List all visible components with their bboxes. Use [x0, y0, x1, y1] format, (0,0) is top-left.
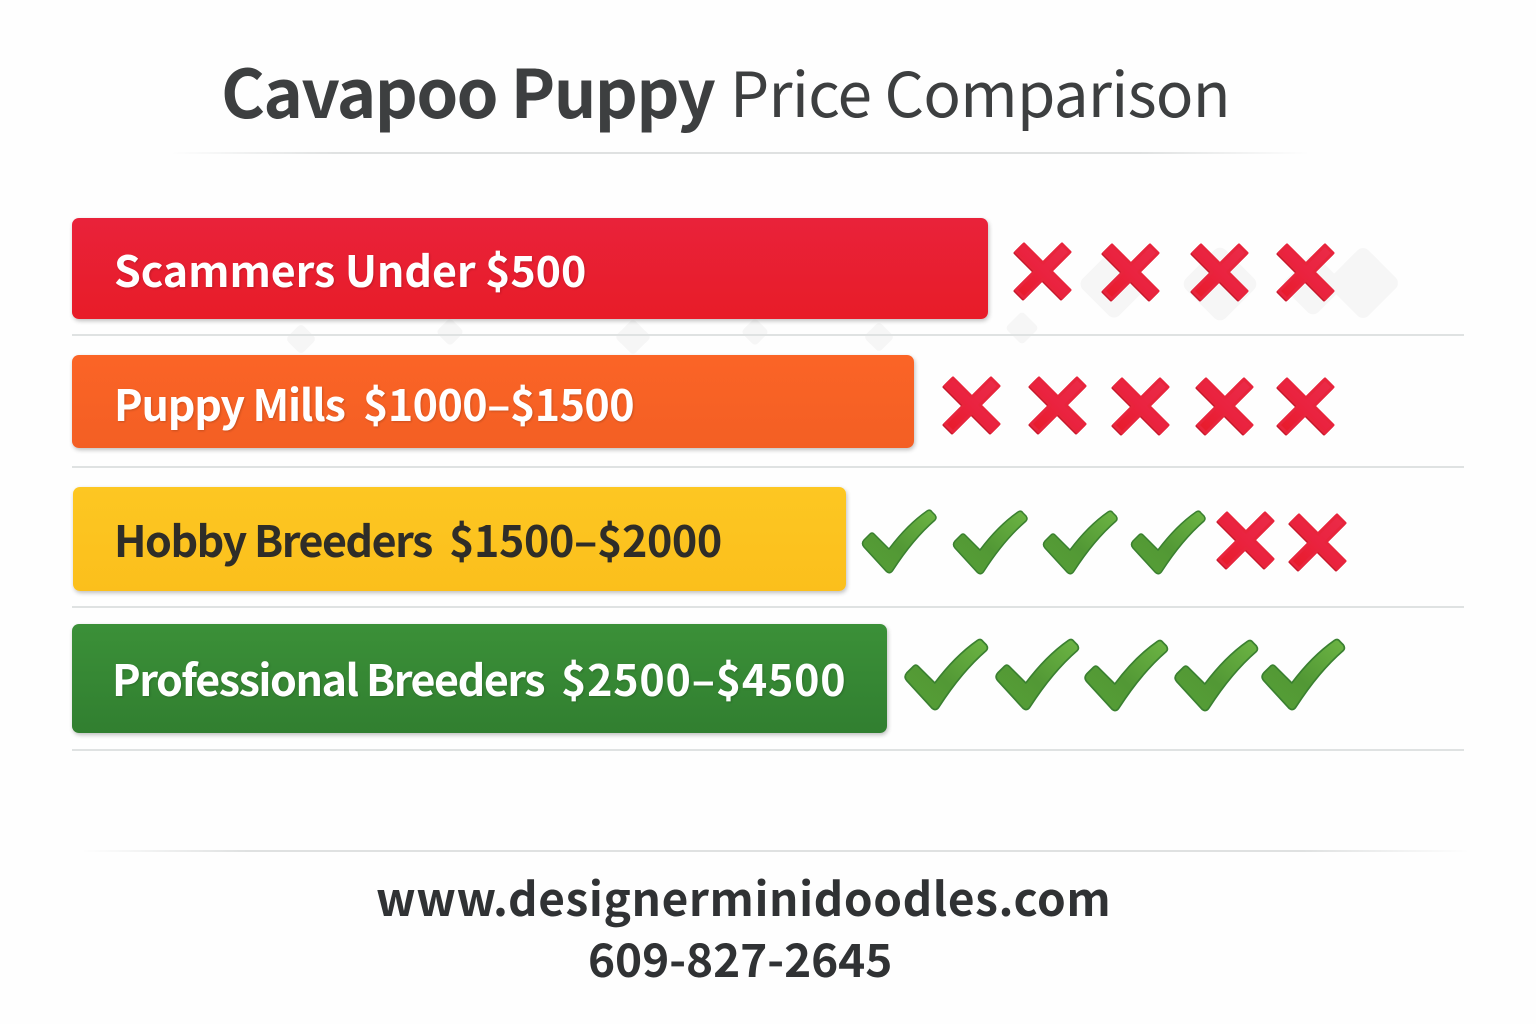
label: professional breeders price: $2500–$4500 — [561, 647, 846, 709]
label: professional breeders price — [112, 647, 846, 709]
label: puppy mills price — [114, 372, 634, 434]
title regular part: Price Comparison — [730, 45, 1230, 135]
bar: professional breeders — [72, 624, 887, 733]
rating: hobby breeders checks and crosses — [862, 510, 1345, 574]
label: hobby breeders price: Hobby Breeders — [114, 508, 432, 570]
bar: hobby breeders — [73, 487, 846, 591]
label: puppy mills price: Puppy Mills — [114, 372, 345, 434]
bar: puppy mills — [72, 355, 914, 448]
label: professional breeders price: Professional Breeders — [112, 647, 544, 709]
label: puppy mills price: $1000–$1500 — [363, 372, 634, 434]
bar: scammers — [72, 218, 988, 319]
footer website: www.designerminidoodles.com — [376, 864, 1111, 930]
rating: scammers crosses — [1015, 244, 1333, 300]
title bold part: Cavapoo Puppy — [221, 41, 714, 138]
label: scammers price: Scammers Under $500 — [114, 238, 586, 300]
label: hobby breeders price: $1500–$2000 — [449, 508, 722, 570]
rating: puppy mills crosses — [944, 378, 1333, 434]
label: hobby breeders price — [114, 508, 722, 570]
rating: professional breeders checks — [905, 640, 1344, 711]
footer phone: 609-827-2645 — [588, 925, 892, 991]
title — [221, 41, 1230, 138]
